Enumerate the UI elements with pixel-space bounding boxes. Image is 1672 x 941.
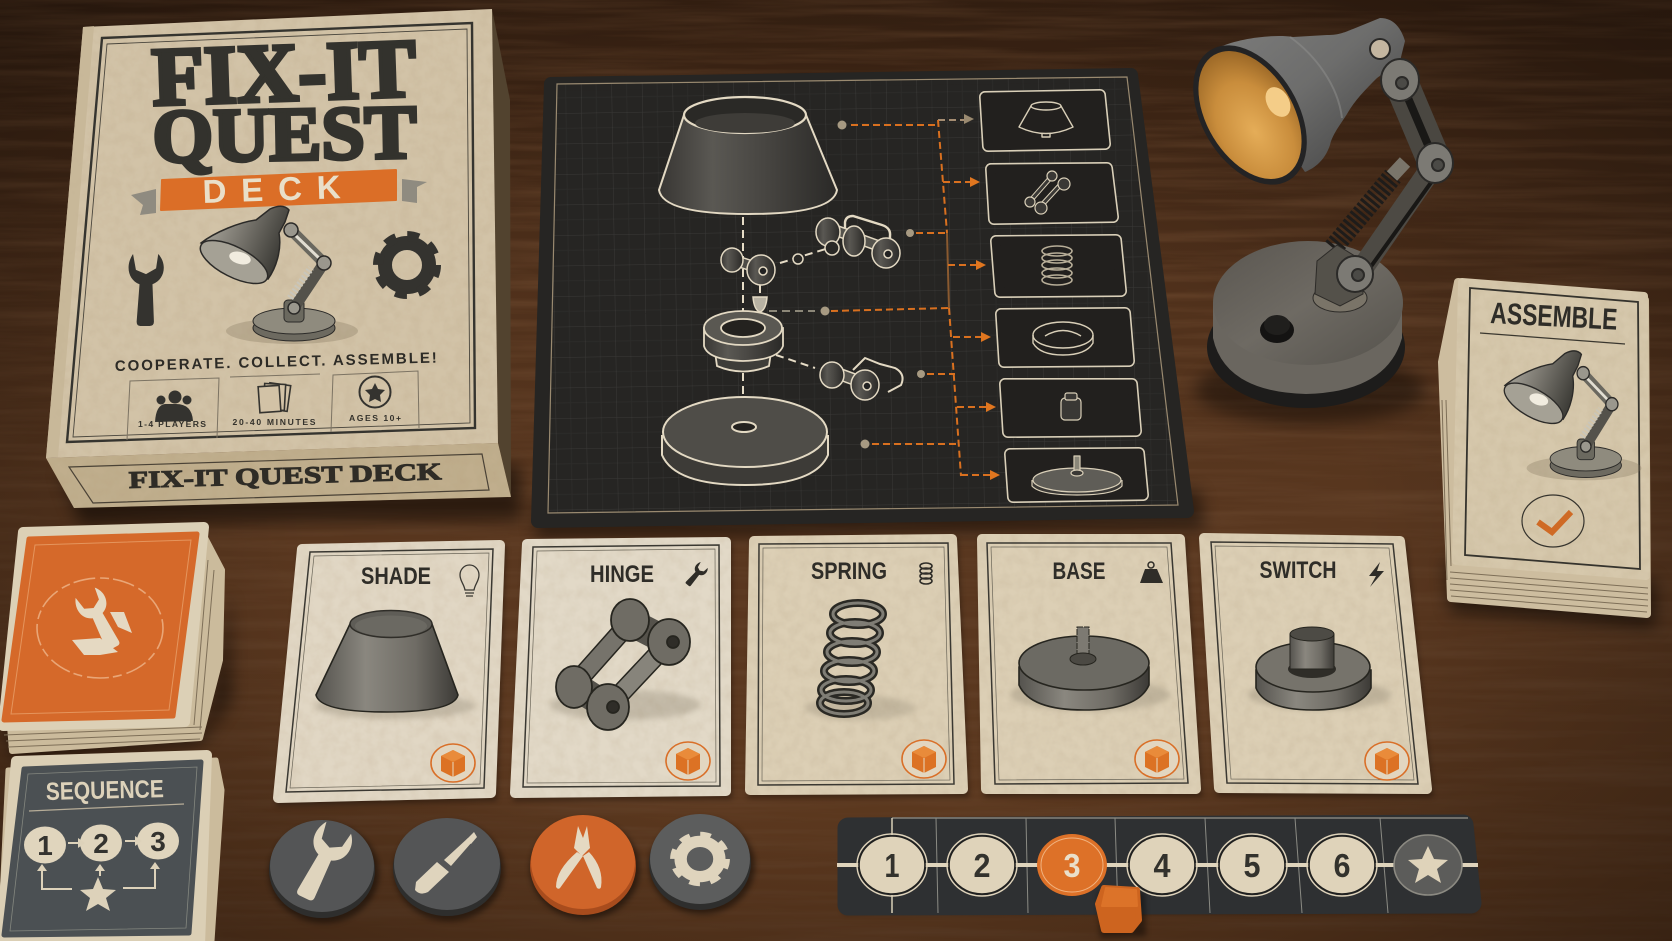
switch drawing <box>1248 627 1392 710</box>
track spaces: 6 <box>1334 847 1350 884</box>
part card: shade <box>276 545 506 806</box>
icon: weight <box>1140 562 1163 583</box>
hinge drawing <box>550 599 700 730</box>
sequence card deck <box>0 755 222 941</box>
sequence steps: 2 <box>93 828 109 859</box>
track spaces: 2 <box>974 847 990 884</box>
lamp shade <box>1170 18 1405 205</box>
token: gear <box>649 814 755 914</box>
orange cube marker <box>1098 888 1146 938</box>
assemble heading: ASSEMBLE <box>1490 297 1618 337</box>
exploded part: lower hinge <box>820 358 903 400</box>
exploded assembly guide lines <box>743 217 832 423</box>
lamp base <box>1207 241 1405 408</box>
orange connector lines <box>831 120 990 476</box>
lamp joints <box>1337 59 1453 292</box>
token: pliers <box>530 815 640 919</box>
icon: wrench <box>683 561 709 589</box>
exploded part: base <box>662 397 828 485</box>
part card: base <box>980 539 1202 797</box>
deck banner <box>131 168 427 215</box>
connector dots <box>820 120 925 448</box>
track spaces: 3 <box>1064 847 1080 884</box>
sequence heading: SEQUENCE <box>45 775 164 806</box>
shade drawing <box>315 610 475 719</box>
hinge title: HINGE <box>590 561 654 588</box>
token: wrench <box>269 820 379 923</box>
progress track <box>837 818 1478 938</box>
parts panel: shade <box>985 95 1105 146</box>
icon: bolt <box>1369 562 1384 587</box>
box side frame <box>69 454 489 503</box>
desk lamp model <box>1170 18 1453 424</box>
box title <box>150 22 417 179</box>
parts panel: spring <box>996 240 1121 292</box>
stat: ages <box>331 371 419 432</box>
icon: wrench <box>129 254 164 326</box>
part card: spring <box>748 539 969 798</box>
cube badge <box>666 742 710 780</box>
box title: FIX-IT <box>150 22 417 123</box>
stat: minutes <box>230 374 320 427</box>
icon: spring <box>920 563 932 584</box>
spring title: SPRING <box>811 558 887 585</box>
box title: QUEST <box>152 90 417 179</box>
stat: minutes: 20-40 MINUTES <box>232 417 316 427</box>
box side label: FIX-IT QUEST DECK <box>128 459 442 494</box>
lamp upper arm <box>1400 80 1435 163</box>
assemble card deck <box>1442 282 1655 628</box>
stat: ages: AGES 10+ <box>349 413 401 423</box>
track spaces: 5 <box>1244 847 1260 884</box>
exploded part: large hinge <box>816 216 900 268</box>
icon: lamp illustration <box>194 206 358 344</box>
base drawing <box>1010 627 1170 711</box>
assemble lamp illustration <box>1499 351 1641 480</box>
icon: bulb <box>460 565 479 596</box>
stat: players <box>127 378 219 440</box>
connector arrowheads <box>964 114 1000 480</box>
stat: players: 1-4 PLAYERS <box>138 419 206 429</box>
spring drawing <box>805 603 915 720</box>
token: screwdriver <box>393 818 504 921</box>
exploded part: small hinge <box>721 248 803 312</box>
deck banner: DECK <box>202 168 355 210</box>
shade title: SHADE <box>361 563 431 590</box>
cube badge <box>902 740 946 778</box>
exploded part: ring collar <box>704 311 783 372</box>
exploded part: shade <box>659 97 837 214</box>
card back emblem <box>37 578 163 678</box>
sequence steps: 1 <box>37 830 53 861</box>
parts panel: hinge <box>991 168 1113 219</box>
parts panel: base <box>1010 453 1143 497</box>
track spaces <box>857 834 1462 896</box>
cube badge <box>431 744 475 782</box>
sequence steps: 3 <box>150 826 166 857</box>
base title: BASE <box>1052 558 1106 585</box>
icon: gear <box>378 236 436 294</box>
cube badge <box>1365 742 1409 780</box>
cube badge <box>1135 740 1179 778</box>
blueprint board <box>535 75 1205 540</box>
lamp lower arm and spring <box>1315 162 1440 306</box>
switch title: SWITCH <box>1260 557 1336 584</box>
part card: switch <box>1202 538 1433 797</box>
game box <box>46 9 522 525</box>
orange card deck <box>3 527 232 760</box>
part card: hinge <box>513 542 732 801</box>
tagline: COOPERATE. COLLECT. ASSEMBLE! <box>115 350 437 375</box>
track spaces: 1 <box>884 847 900 884</box>
parts panel: switch <box>1005 384 1136 432</box>
check badge <box>1522 495 1584 547</box>
track spaces: 4 <box>1154 847 1171 884</box>
parts panel: ring <box>1001 313 1129 362</box>
sequence steps <box>24 822 179 911</box>
